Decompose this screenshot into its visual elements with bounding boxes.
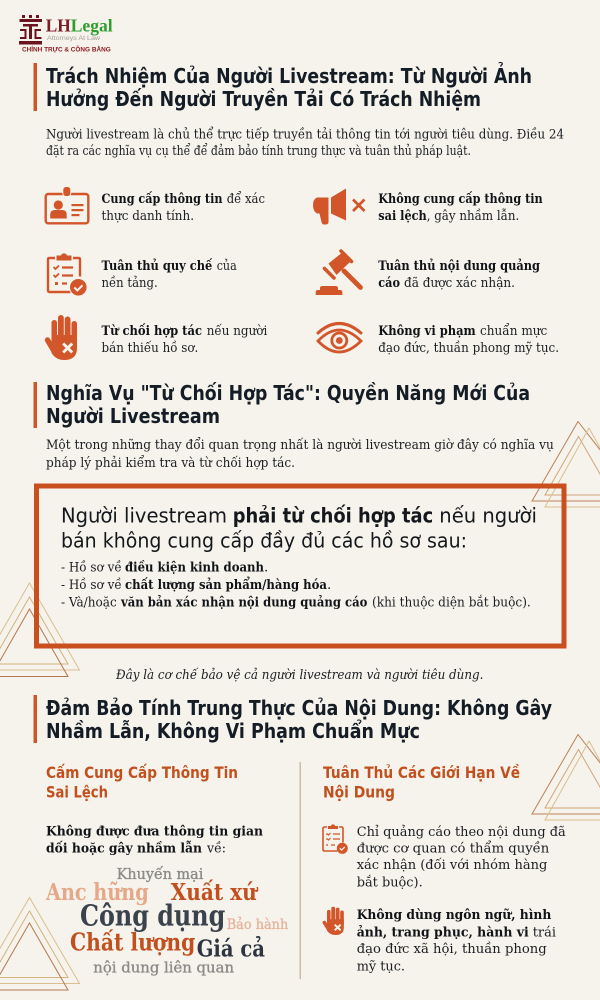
callout heading: Người livestream [61,504,227,528]
word cloud: Khuyến mại [117,866,204,883]
word cloud: Xuất xứ [171,878,258,906]
text: refuse cooperation: nếu người [207,323,267,339]
text: no false information: sai lệch [378,208,427,224]
callout list: chất lượng sản phẩm/hàng hóa [125,577,327,593]
word cloud: Giá cả [197,935,265,963]
callout heading: phải từ chối hợp tác [233,504,433,528]
intro paragraph: section 1: đặt ra các nghĩa vụ cụ thể để đảm bảo tính trung thực và tuân thủ pháp luật. [46,143,471,159]
callout list: - Và/hoặc [61,596,117,611]
text: do not mislead: Không được đưa thông tin gian [46,824,263,840]
logo: LHLegal [19,15,113,54]
callout heading [61,504,537,552]
text: no ethics violation [378,323,559,356]
text: platform rules [102,258,237,291]
text: platform rules: nền tảng. [102,275,158,291]
heading: section 1: Hưởng Đến Người Truyền Tải Có Trách Nhiệm [46,87,481,111]
icon: megaphone with cross [313,188,364,224]
callout list: . [327,578,331,593]
subheading: content limits: Tuân Thủ Các Giới Hạn Về [323,763,520,782]
text: do not mislead [46,824,263,856]
heading: section 3: Nhầm Lẫn, Không Vi Phạm Chuẩn Mực [46,719,420,743]
word cloud: Anc hững [45,878,149,906]
icon: ID card [46,186,88,223]
text: approved ad content [378,258,541,291]
text: no ethics violation: chuẩn mực [480,323,547,339]
callout heading: nếu người [439,504,537,528]
intro paragraph: section 2: pháp lý phải kiểm tra và từ chối hợp tác. [46,455,295,471]
callout list: . [264,561,268,576]
heading: section 2: Nghĩa Vụ "Từ Chối Hợp Tác": Quyền Năng Mới Của [46,381,530,405]
text: no offensive language: mỹ tục. [357,960,405,975]
callout list: - Hồ sơ về [61,560,122,576]
icon: small stop hand [324,907,344,935]
text: approved ad content: đã được xác nhận. [404,276,515,291]
text: approved content only: Chỉ quảng cáo theo nội dung đã [357,825,566,840]
text: approved content only: được cơ quan có thẩm quyền [357,841,550,857]
word cloud: Chất lượng [70,928,195,957]
logo: LHLegal: Legal [71,16,113,36]
text: approved content only [357,825,566,891]
subheading: no false information: Sai Lệch [46,783,108,802]
text: provide identity: Cung cấp thông tin [102,191,223,207]
subheading: content limits: Nội Dung [323,783,395,802]
decorative triangles: middle left [0,583,80,676]
word cloud: nội dung liên quan [93,961,234,977]
intro paragraph: section 2: Một trong những thay đổi quan trọng nhất là người livestream giờ đây có nghĩa vụ [46,437,554,453]
text: do not mislead: dối hoặc gây nhầm lẫn [46,840,202,856]
text: refuse cooperation: bán thiếu hồ sơ. [102,340,198,356]
callout list: văn bản xác nhận nội dung quảng cáo [120,595,367,611]
text: no false information: , gây nhầm lẫn. [427,208,519,224]
icon: eye [318,324,361,352]
icon: stop hand [48,315,77,360]
text: approved ad content: cáo [378,275,400,291]
text: platform rules: của [217,259,237,274]
word cloud: Bảo hành [227,917,289,933]
text: approved content only: bắt buộc). [357,875,423,891]
callout list: điều kiện kinh doanh [125,560,264,576]
logo name: LH [46,16,71,36]
text: do not mislead: về: [206,840,226,856]
intro paragraph: section 1 [46,126,564,159]
icon: clipboard checklist [48,253,87,296]
heading: section 1 [34,63,532,111]
decorative triangles: bottom left [0,898,80,990]
text: no ethics violation: đạo đức, thuần phong mỹ tục. [378,340,559,356]
callout list [61,560,531,611]
heading: section 1: Trách Nhiệm Của Người Livestream: Từ Người Ảnh [46,63,532,88]
icon: gavel [316,251,360,295]
icon: small clipboard [323,824,348,854]
text: no offensive language: đạo đức xã hội, thuần phong [357,941,547,957]
text: no offensive language: Không dùng ngôn ngữ, hình [357,907,552,923]
callout box: refusal conditions [36,486,564,646]
word cloud [45,866,289,977]
text: approved ad content: Tuân thủ nội dung quảng [378,258,541,274]
callout list: (khi thuộc diện bắt buộc). [372,595,531,611]
text: approved content only: xác nhận (đối với nhóm hàng [357,857,548,873]
heading: section 3 [34,695,552,743]
logo: LHLegal: CHÍNH TRỰC & CÔNG BẰNG [22,45,111,54]
text: refuse cooperation [102,323,267,356]
text: no offensive language: ảnh, trang phục, hành vi [357,925,529,941]
text: provide identity: để xác [227,191,265,207]
text: no false information: Không cung cấp thông tin [378,191,543,207]
text: no offensive language: trái [533,926,556,941]
logo mark [19,15,42,44]
text: no false information [378,191,543,224]
callout heading: bán không cung cấp đầy đủ các hồ sơ sau: [61,528,467,552]
subheading: no false information: Cấm Cung Cấp Thông Tin [46,763,238,782]
text: no ethics violation: Không vi phạm [378,323,476,339]
decorative triangles: upper right [532,422,600,507]
word cloud: Công dụng [80,899,225,933]
text: no offensive language [357,907,556,975]
logo: LHLegal: Attorneys At Law [47,35,100,42]
text: provide identity: thực danh tính. [102,209,194,224]
subheading: no false information [46,763,238,802]
text: platform rules: Tuân thủ quy chế [102,258,213,274]
subheading: content limits [323,763,520,802]
decorative triangles: lower right [532,734,600,820]
text: provide identity [102,191,265,224]
callout list: - Hồ sơ về [61,577,122,593]
text: refuse cooperation: Từ chối hợp tác [102,323,202,339]
intro paragraph: section 2 [46,437,554,471]
italic note: Đây là cơ chế bảo vệ cả người livestream và người tiêu dùng. [115,667,483,683]
heading: section 2: Người Livestream [46,404,220,428]
heading: section 2 [34,381,530,428]
